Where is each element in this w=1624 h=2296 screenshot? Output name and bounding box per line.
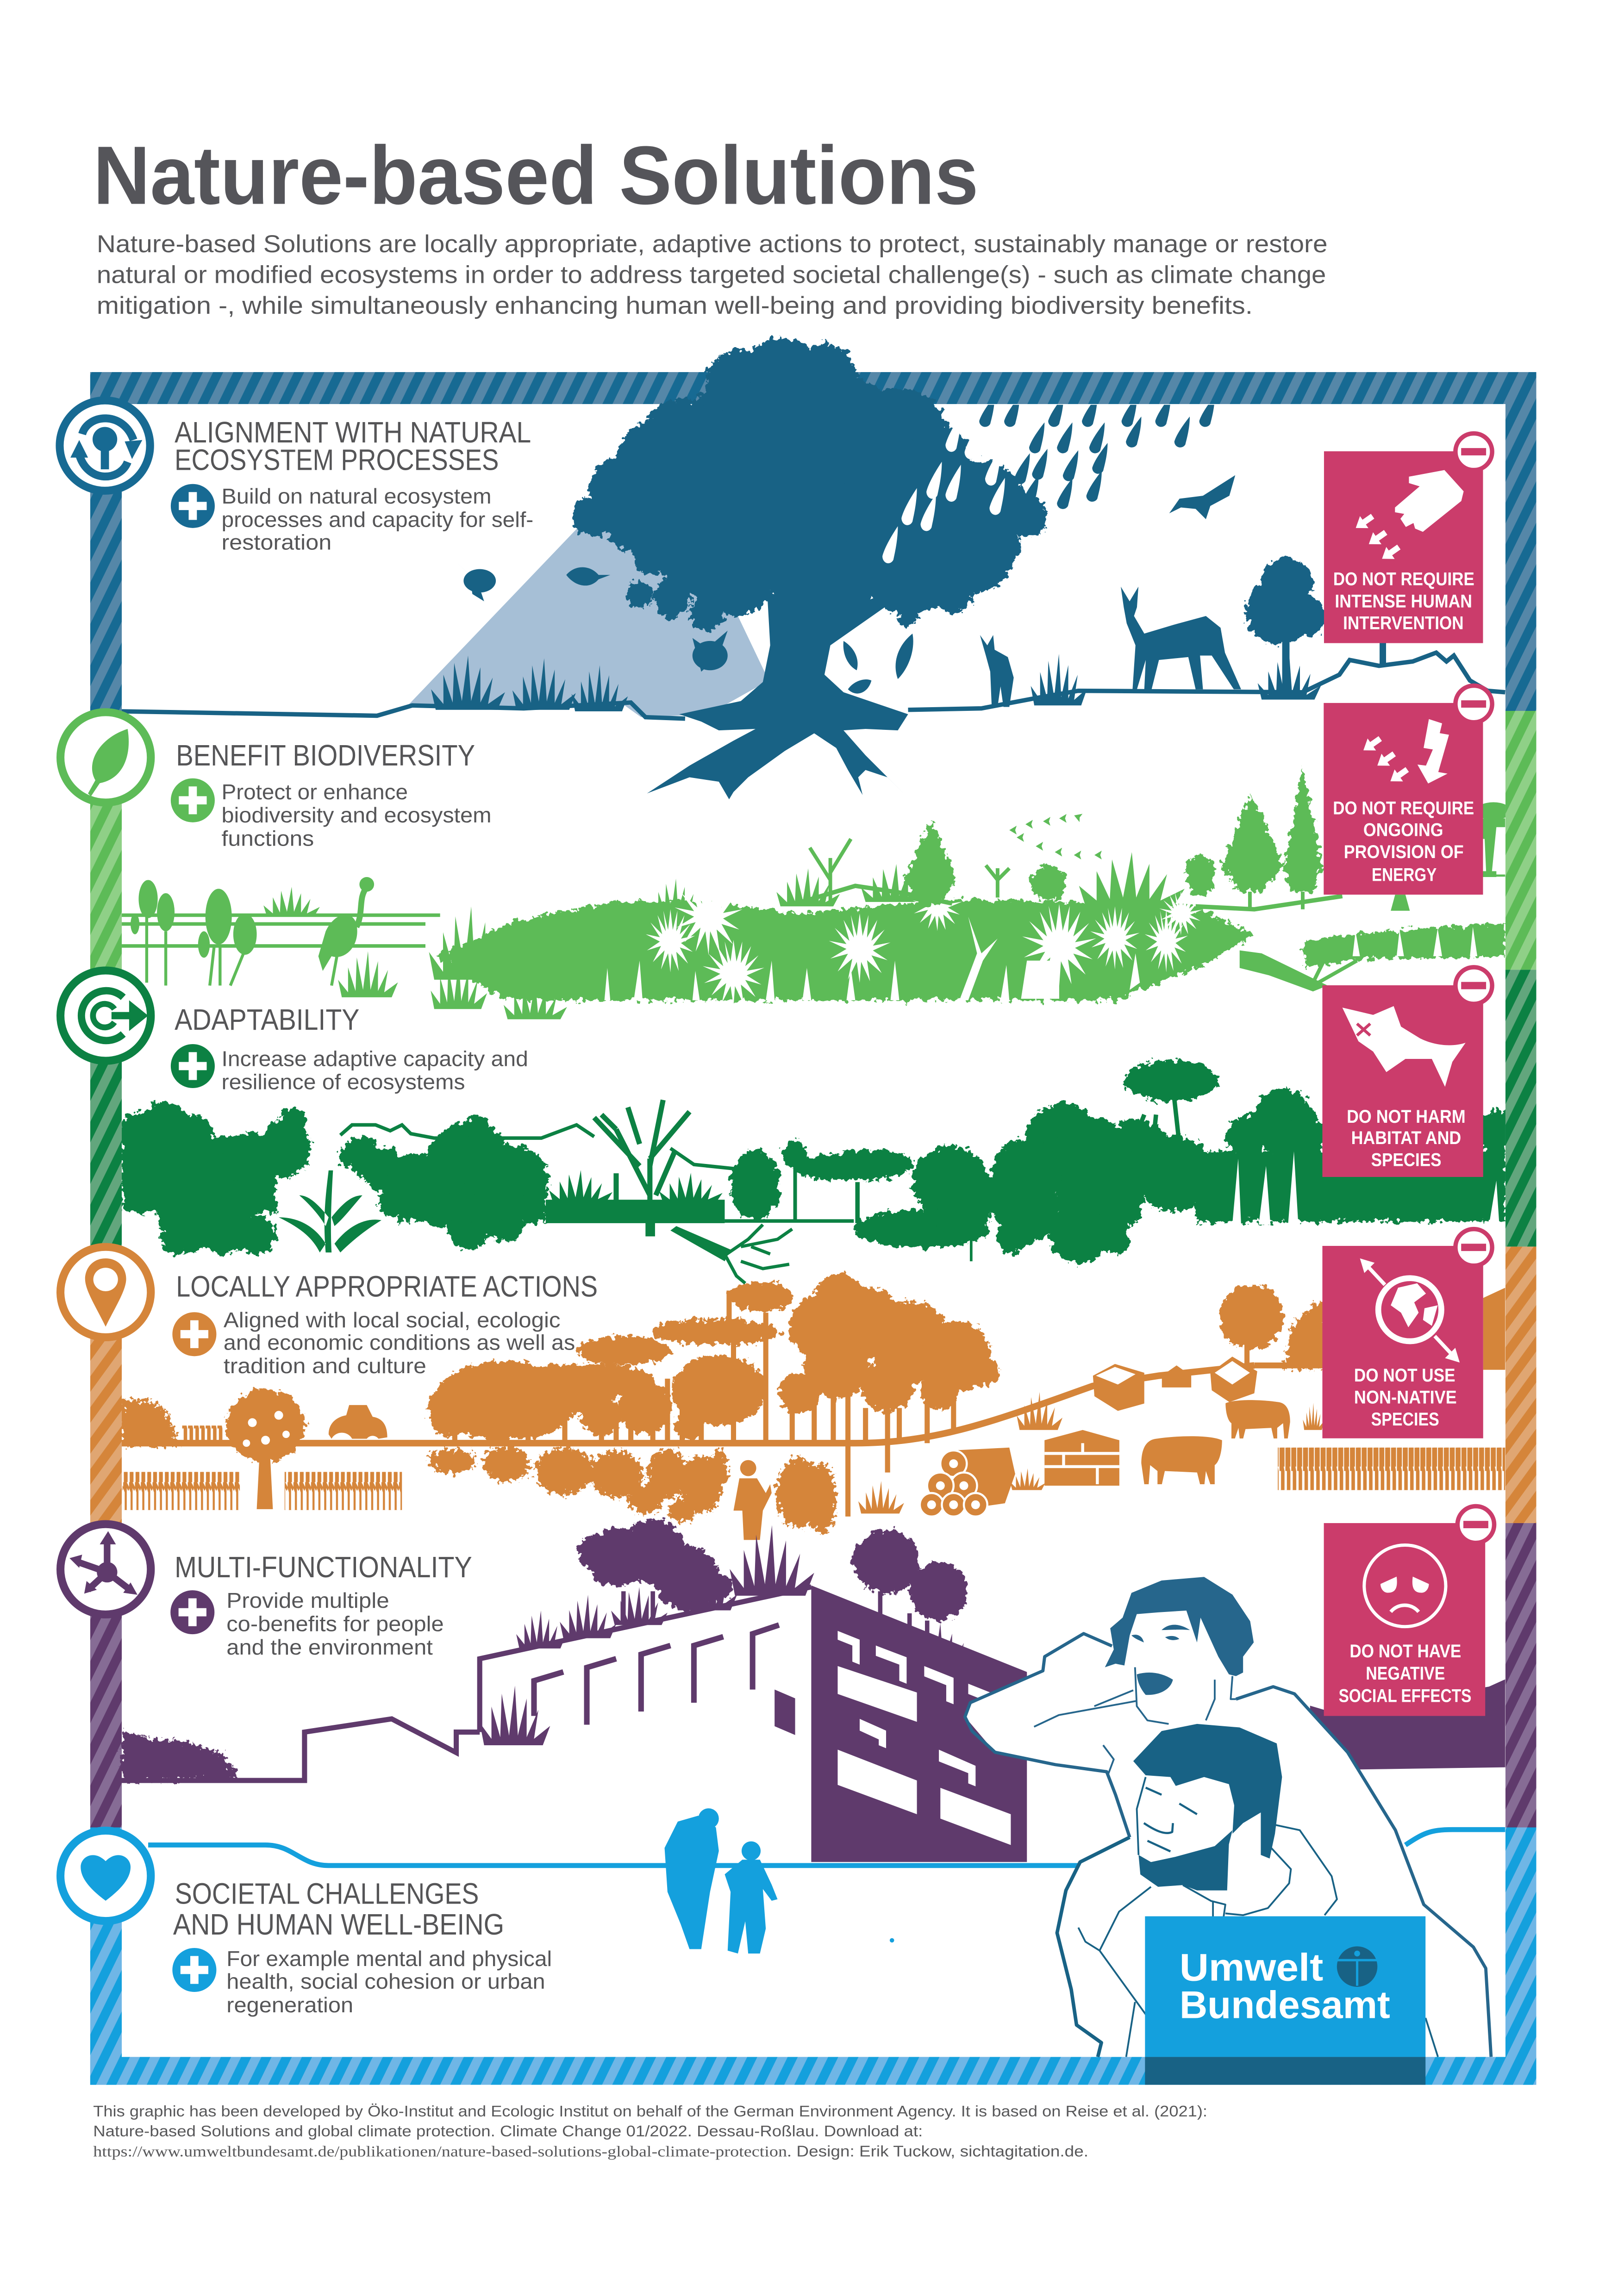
icon: sad face xyxy=(1364,1545,1446,1627)
intro text: mitigation -, while simultaneously enhancing human well-being and providing biodiversity benefits. xyxy=(97,292,1253,319)
logo box: Umwelt Bundesamt: Bundesamt xyxy=(1180,1983,1390,2026)
label: DO NOT REQUIRE xyxy=(1333,798,1474,818)
section 2 text: biodiversity and ecosystem xyxy=(222,803,492,827)
label: DO NOT USE xyxy=(1354,1365,1455,1386)
section 1 text: processes and capacity for self- xyxy=(222,508,533,532)
person xyxy=(733,1460,772,1540)
horizon line xyxy=(340,1125,854,1221)
minus badge xyxy=(1455,1229,1492,1266)
label: SOCIAL EFFECTS xyxy=(1339,1686,1471,1706)
white grass bursts xyxy=(605,876,1203,1006)
title: Nature-based Solutions xyxy=(93,129,979,222)
water lines xyxy=(122,915,440,946)
icon: fish xyxy=(1343,1006,1466,1087)
right acacia xyxy=(1391,802,1511,911)
label: DO NOT HARM xyxy=(1347,1107,1466,1127)
section 4 text: tradition and culture xyxy=(224,1354,426,1378)
section 3 text: ADAPTABILITY xyxy=(175,1003,359,1036)
right forest xyxy=(962,1060,1515,1264)
label: INTENSE HUMAN xyxy=(1335,591,1472,612)
logo box: Umwelt Bundesamt xyxy=(1145,1916,1425,2085)
logo box: Umwelt Bundesamt: Umwelt xyxy=(1180,1946,1323,1989)
leaves and butterfly xyxy=(566,567,913,694)
icon: location pin xyxy=(61,1247,151,1337)
label: NON-NATIVE xyxy=(1354,1388,1457,1408)
section 4 text: LOCALLY APPROPRIATE ACTIONS xyxy=(176,1269,598,1303)
post under sign xyxy=(1380,642,1386,666)
label: INTERVENTION xyxy=(1343,613,1464,633)
tree trunk and roots xyxy=(647,594,908,799)
white rain drops in canopy xyxy=(882,415,1005,563)
woman face xyxy=(1131,1625,1190,1695)
section 5 text: MULTI-FUNCTIONALITY xyxy=(175,1550,472,1584)
section 1 text: ECOSYSTEM PROCESSES xyxy=(175,443,499,477)
section 6 text: For example mental and physical xyxy=(226,1947,552,1971)
footer credits: Nature-based Solutions and global climate protection. Climate Change 01/2022. Dessau-Roßlau. Download at: xyxy=(93,2122,923,2140)
section 6 text: regeneration xyxy=(226,1993,353,2017)
section 2 text: functions xyxy=(222,827,314,851)
minus badge xyxy=(1455,685,1492,722)
red panel 5 xyxy=(1324,1506,1494,1716)
icon: multi-functional arrows xyxy=(61,1524,151,1614)
lower right bank xyxy=(1240,924,1505,991)
section 4 text: Aligned with local social, ecologic xyxy=(224,1308,561,1332)
scene: dark green forest xyxy=(119,1060,1515,1283)
label xyxy=(1339,1641,1471,1706)
fruit tree xyxy=(226,1389,305,1509)
section 1 text: Build on natural ecosystem xyxy=(222,484,492,508)
section 2 text: BENEFIT BIODIVERSITY xyxy=(176,739,475,772)
trunks xyxy=(624,1591,927,1650)
front windows xyxy=(534,1625,779,1725)
bird xyxy=(1169,475,1235,519)
red panel 1 xyxy=(1324,433,1492,643)
houses xyxy=(1093,1356,1257,1411)
white reeds on right xyxy=(1232,1151,1499,1225)
label xyxy=(1333,569,1474,633)
section 6 text: SOCIETAL CHALLENGES xyxy=(175,1877,479,1910)
people: couple illustration xyxy=(965,1577,1491,2057)
trees on ridge xyxy=(810,765,1322,909)
label: DO NOT HAVE xyxy=(1349,1641,1461,1661)
intro text: Nature-based Solutions are locally appropriate, adaptive actions to protect, sustainably manage or restore xyxy=(97,230,1328,258)
tree trunks xyxy=(455,1291,1247,1517)
label xyxy=(1347,1107,1466,1170)
crop rows xyxy=(123,1425,1505,1510)
label: SPECIES xyxy=(1371,1409,1439,1430)
intro text xyxy=(97,230,1328,319)
building front outline xyxy=(480,1587,811,1732)
woman outline xyxy=(965,1634,1491,2057)
wetland hill xyxy=(436,899,1254,1000)
label: SPECIES xyxy=(1371,1150,1441,1170)
section 2 text xyxy=(171,739,492,851)
label xyxy=(1354,1365,1457,1430)
label xyxy=(1333,798,1474,885)
tree canopy xyxy=(572,337,1048,634)
left bush and skyline line xyxy=(122,1719,480,1780)
side balconies xyxy=(837,1631,1011,1845)
shaded slope behind tree xyxy=(408,506,769,717)
footer credits: https://www.umweltbundesamt.de/publikationen/nature-based-solutions-global-climate-protection. xyxy=(93,2143,792,2160)
building side wall xyxy=(811,1586,1027,1862)
icon: arrows xyxy=(1352,510,1403,565)
left forest xyxy=(119,1101,549,1256)
deer xyxy=(1121,587,1241,689)
section 3 text: resilience of ecosystems xyxy=(222,1070,465,1094)
fawn xyxy=(980,635,1014,707)
section 1 text: ALIGNMENT WITH NATURAL xyxy=(175,416,531,449)
section 4 text xyxy=(172,1269,598,1378)
grass xyxy=(858,1481,904,1513)
left hill xyxy=(122,1399,177,1446)
section 2 text: Protect or enhance xyxy=(222,780,408,804)
grass tufts xyxy=(431,654,1321,711)
parent and child silhouette xyxy=(665,1808,894,1954)
icon: arrows xyxy=(1359,733,1412,787)
label: ENERGY xyxy=(1372,865,1437,885)
white clearing with plant xyxy=(279,1162,381,1261)
grass tufts left xyxy=(338,852,1185,1019)
wall slit xyxy=(775,1690,795,1735)
section 3 text xyxy=(171,1003,528,1094)
icon: natural processes xyxy=(60,400,150,491)
icon: globe and arrows xyxy=(1360,1258,1460,1363)
ground path xyxy=(122,1365,1254,1443)
acacia trunks xyxy=(1130,1093,1181,1158)
crane xyxy=(319,877,374,986)
minus badge xyxy=(1457,1506,1494,1543)
scene: green wetland xyxy=(122,765,1511,1019)
icon: leaf xyxy=(61,712,151,803)
footer credits: Design: Erik Tuckow, sichtagitation.de. xyxy=(796,2142,1088,2159)
section 4 text: and economic conditions as well as xyxy=(224,1330,575,1354)
man outline xyxy=(1057,1777,1438,2057)
cows xyxy=(1141,1400,1290,1484)
label: PROVISION OF xyxy=(1344,842,1464,862)
section 6 text: AND HUMAN WELL-BEING xyxy=(173,1908,504,1941)
man hair xyxy=(1133,1724,1282,1859)
fallen branch xyxy=(670,1225,792,1283)
section 3 text: Increase adaptive capacity and xyxy=(222,1047,528,1071)
icon: adaptability xyxy=(61,971,151,1061)
forest canopy xyxy=(428,1273,1284,1440)
label: NEGATIVE xyxy=(1366,1663,1445,1684)
footer credits: This graphic has been developed by Öko-Institut and Ecologic Institut on behalf of the German Environment Agency. It is based on Reise et al. (2021): xyxy=(93,2103,1207,2120)
section 5 text xyxy=(170,1550,472,1659)
central trees xyxy=(546,1100,990,1261)
label: HABITAT AND xyxy=(1351,1128,1461,1148)
intro text: natural or modified ecosystems in order to address targeted societal challenge(s) - such as climate change xyxy=(97,261,1326,289)
cattails xyxy=(131,880,257,986)
man beard xyxy=(1138,1830,1232,1891)
white body fill xyxy=(965,1621,1491,2057)
icon: hand xyxy=(1395,470,1464,532)
red panel 4 xyxy=(1322,1229,1492,1438)
ground line xyxy=(122,653,1505,719)
stacked crates xyxy=(1010,1430,1119,1490)
butterfly xyxy=(458,563,496,601)
minus badge xyxy=(1455,433,1492,470)
section 6 text xyxy=(172,1877,552,2017)
section 5 text: Provide multiple xyxy=(226,1588,389,1612)
right hill xyxy=(1017,1288,1505,1430)
woman hair xyxy=(1105,1577,1254,1676)
striped frame xyxy=(90,372,1536,2085)
scene: blue tree and wildlife xyxy=(122,337,1505,799)
undergrowth reflection xyxy=(428,1446,836,1534)
log pile xyxy=(920,1448,1015,1517)
background wall right xyxy=(1310,1679,1505,1770)
branch line xyxy=(797,886,1343,909)
section 1 text xyxy=(171,416,533,554)
red panel 3 xyxy=(1322,967,1492,1177)
roof grasses xyxy=(480,1525,975,1745)
section 6 text: health, social cohesion or urban xyxy=(226,1969,545,1993)
scene: orange land use xyxy=(122,1273,1505,1540)
scene: purple green-roof building xyxy=(122,1519,1505,1862)
flock of birds xyxy=(1009,811,1102,859)
tractor xyxy=(329,1405,387,1439)
icon: heart xyxy=(61,1830,151,1921)
right tree xyxy=(1245,557,1326,692)
logo emblem xyxy=(1337,1947,1378,1987)
blue path line xyxy=(148,1829,1505,1866)
minus badge xyxy=(1455,967,1492,1004)
section 5 text: and the environment xyxy=(226,1635,433,1659)
label: ONGOING xyxy=(1363,820,1443,840)
red panel 2 xyxy=(1324,685,1492,895)
label: DO NOT REQUIRE xyxy=(1333,569,1474,590)
section 5 text: co-benefits for people xyxy=(226,1612,444,1636)
section 1 text: restoration xyxy=(222,530,331,554)
icon: lightning xyxy=(1418,719,1449,784)
blue rain drops xyxy=(979,396,1215,509)
footer credits xyxy=(93,2103,1207,2160)
roof trees xyxy=(578,1519,968,1621)
grass tuft xyxy=(263,887,320,917)
